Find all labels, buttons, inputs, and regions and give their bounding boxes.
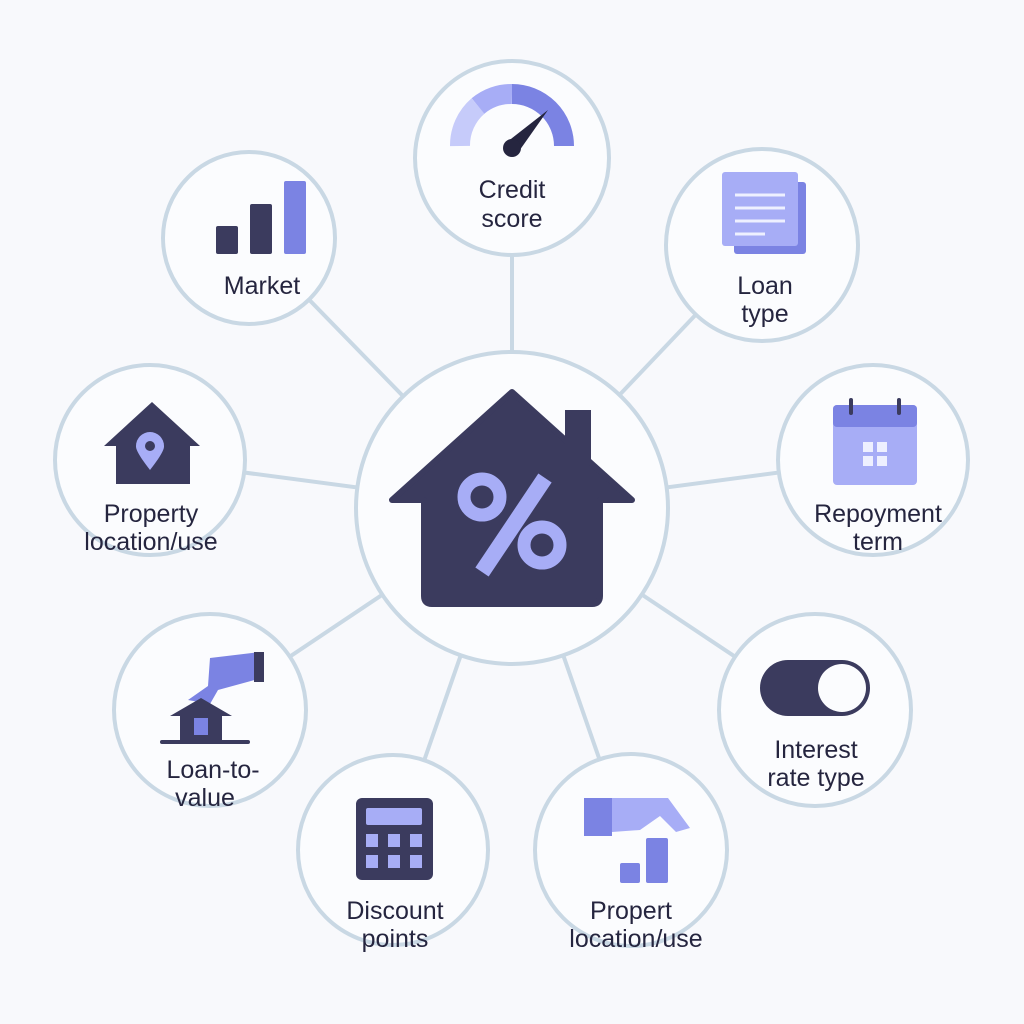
node: loan-to-value: value [175, 784, 235, 812]
node: repayment term [778, 365, 968, 556]
node: discount points: Discount [346, 897, 444, 925]
center hub: house with percent [356, 352, 668, 664]
node: loan type: Loan [737, 272, 793, 300]
node: loan type [666, 149, 858, 341]
node: interest rate type: rate type [767, 764, 865, 792]
node: credit score: score [481, 205, 543, 233]
node: credit score [415, 61, 609, 255]
node: loan-to-value [114, 614, 306, 812]
node: property location/use left: Property [104, 500, 199, 528]
node: propert location/use [535, 754, 727, 953]
node: credit score: Credit [479, 176, 545, 204]
node: discount points [298, 755, 488, 953]
node: loan-to-value: Loan-to- [166, 756, 260, 784]
node: discount points: points [362, 925, 428, 953]
node: propert location/use: location/use [569, 925, 703, 953]
node: propert location/use: Propert [590, 897, 672, 925]
node: repayment term: term [853, 528, 903, 556]
node: property location/use left [55, 365, 245, 556]
node: market [163, 152, 335, 324]
node: repayment term: Repoyment [814, 500, 942, 528]
node: interest rate type [719, 614, 911, 806]
node: loan type: type [741, 300, 789, 328]
node: market: Market [224, 272, 300, 300]
node: interest rate type: Interest [774, 736, 858, 764]
node: property location/use left: location/use [84, 528, 218, 556]
